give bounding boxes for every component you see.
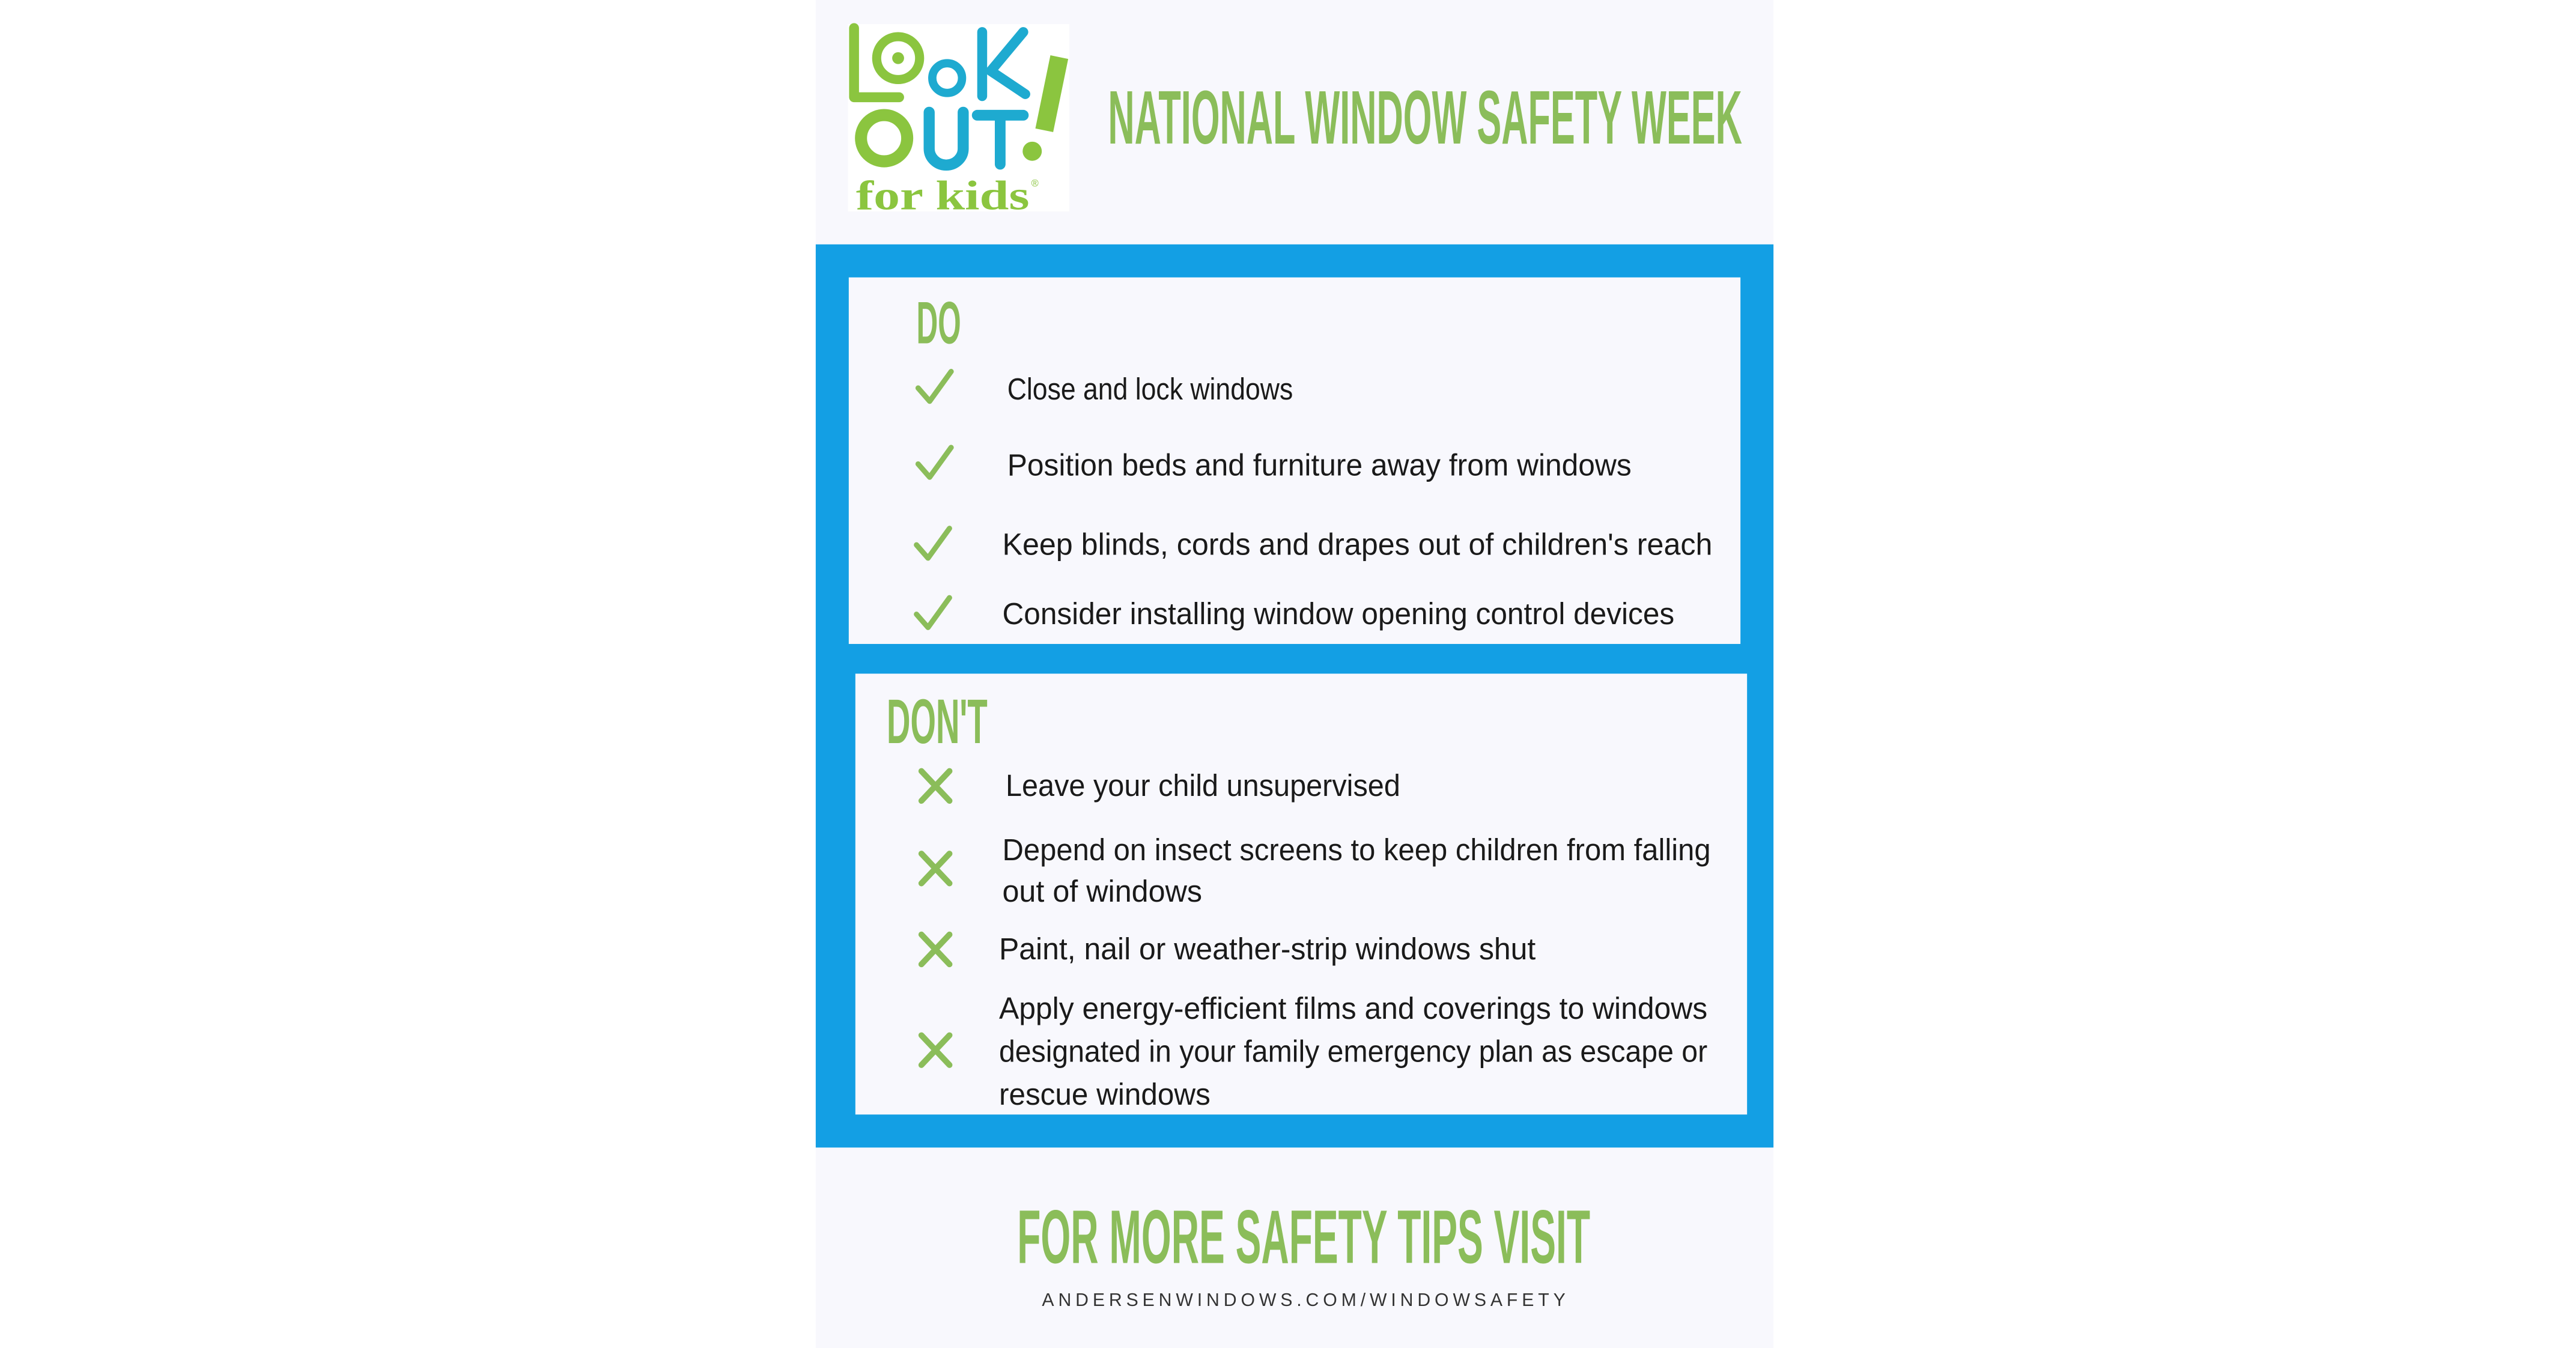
panel: dont: Depend on insect screens to keep children from falling: [1002, 833, 1711, 867]
panel: dont: Paint, nail or weather-strip windows shut: [999, 932, 1536, 966]
heading: do: DO: [917, 290, 961, 356]
panel: dont: out of windows: [1002, 874, 1202, 908]
panel: dont: designated in your family emergency plan as escape or: [999, 1034, 1707, 1068]
heading: dont: DON'T: [887, 687, 988, 757]
footer url: ANDERSENWINDOWS.COM/WINDOWSAFETY: [1042, 1290, 1566, 1310]
panel: do: [849, 278, 1740, 644]
blue frame: [816, 244, 1773, 1147]
logo: [848, 24, 1069, 219]
logo: ®: [1031, 178, 1039, 189]
panel: dont: Apply energy-efficient films and coverings to windows: [999, 991, 1707, 1025]
panel: do: Consider installing window opening control devices: [1002, 597, 1674, 631]
panel: do: Keep blinds, cords and drapes out of children's reach: [1002, 527, 1712, 562]
panel: dont: rescue windows: [999, 1077, 1211, 1111]
panel: do: Close and lock windows: [1007, 372, 1293, 406]
logo: for kids: [856, 173, 1030, 219]
panel: do: Position beds and furniture away from windows: [1007, 448, 1632, 482]
card background: [816, 0, 1773, 1348]
footer heading: FOR MORE SAFETY TIPS VISIT: [1017, 1195, 1590, 1280]
text: NATIONAL WINDOW SAFETY WEEK: [1108, 75, 1742, 160]
panel: dont: [855, 673, 1747, 1114]
panel: dont: Leave your child unsupervised: [1006, 768, 1400, 803]
